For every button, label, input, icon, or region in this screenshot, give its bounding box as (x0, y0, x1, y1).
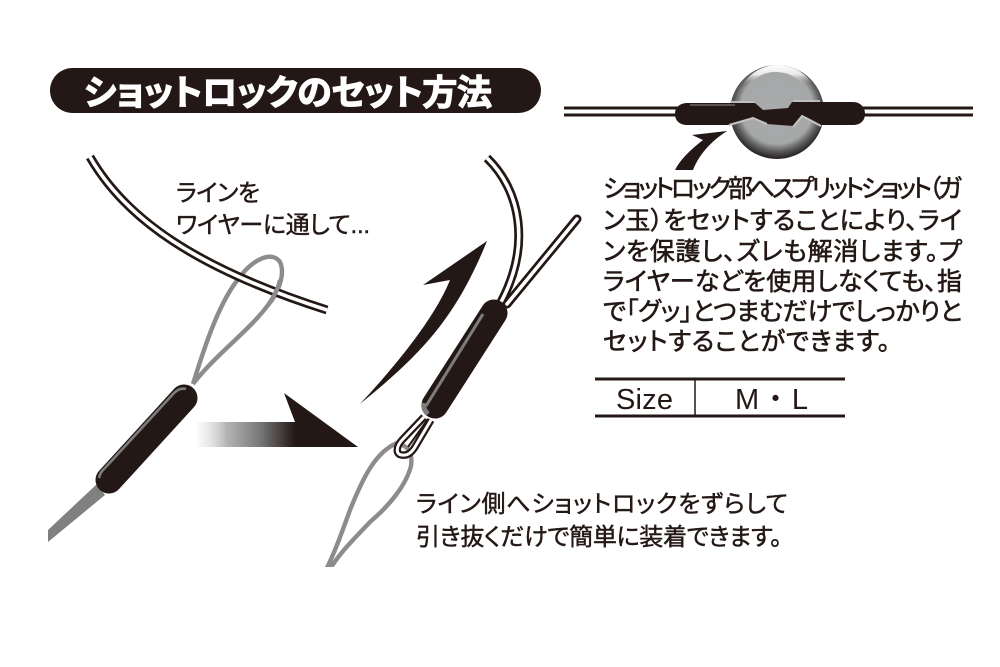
text: threading the wire: ワイヤーに通して... (176, 212, 370, 239)
text: description: ショットロック部へスプリットショット（ガ (603, 175, 962, 203)
size table: M・L (735, 384, 808, 416)
icon: split shot on sinker (564, 65, 973, 159)
text: slide and pull (416, 491, 788, 551)
size table (595, 379, 845, 416)
arrow: right gradient (197, 393, 358, 447)
text: threading the wire: ラインを (176, 180, 260, 207)
text: description: ン玉）をセットすることにより、ライ (603, 207, 962, 235)
illustration: line loop through wire (48, 157, 327, 542)
text: threading the wire (176, 180, 370, 239)
text: description: ンを保護し、ズレも解消します。プ (603, 238, 962, 266)
title banner: ショットロックのセット方法 (84, 74, 492, 113)
text: slide and pull: ライン側へショットロックをずらして (416, 491, 788, 518)
sinker 2 (424, 313, 494, 414)
arrow: curved upward (360, 241, 487, 404)
sinker 1 (99, 389, 186, 480)
text: description: で「グッ」とつまむだけでしっかりと (603, 298, 962, 326)
text: description: ライヤーなどを使用しなくても、指 (603, 268, 962, 296)
size table: Size (616, 384, 673, 416)
text: description (603, 175, 962, 356)
text: slide and pull: 引き抜くだけで簡単に装着できます。 (416, 524, 782, 551)
illustration: sinker slid onto the line (325, 158, 577, 572)
text: description: セットすることができます。 (603, 328, 890, 356)
arrow: curved pointer to split shot (675, 131, 727, 170)
